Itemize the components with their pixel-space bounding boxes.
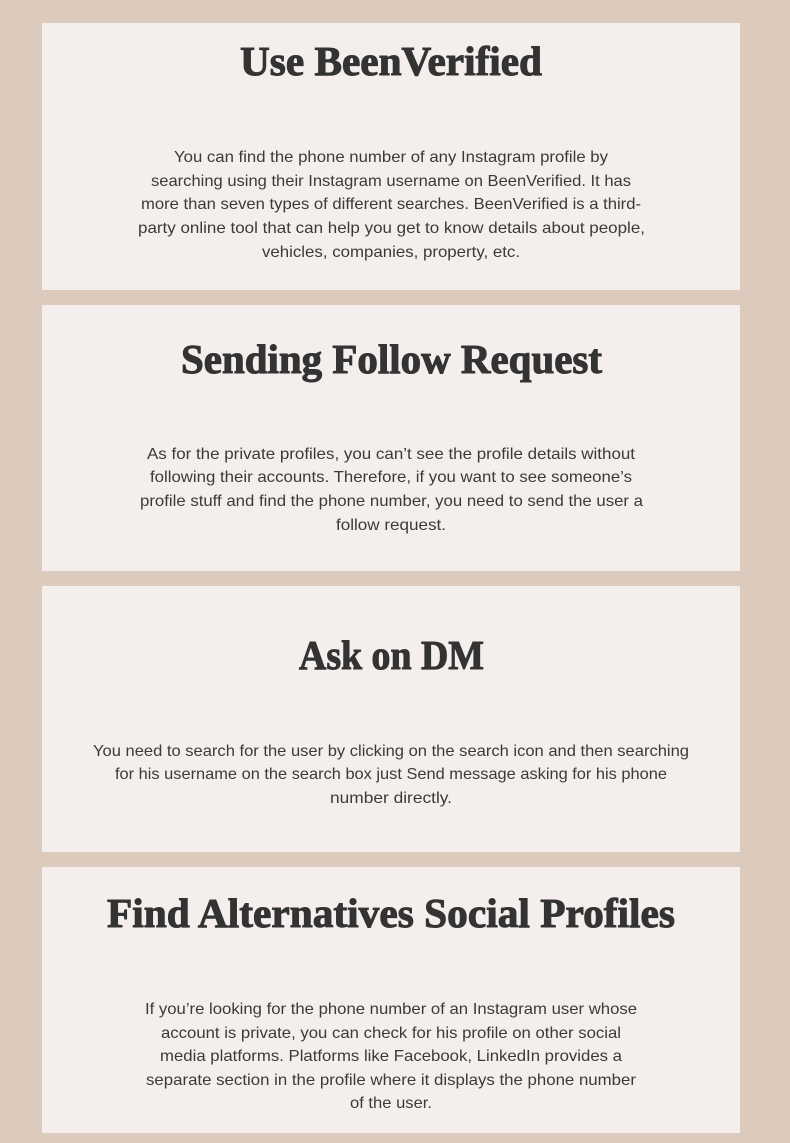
heading: Sending Follow Request: Sending Follow Request xyxy=(181,336,602,382)
text block: alternative profiles description: account is private, you can check for his profile on other social xyxy=(161,1025,621,1042)
text block: direct message description xyxy=(93,743,689,807)
panel: Sending Follow Request xyxy=(42,305,740,571)
heading: Ask on DM: Ask on DM xyxy=(299,632,484,678)
panel: Ask on DM xyxy=(42,586,740,852)
text block: direct message description: You need to search for the user by clicking on the search icon and then searching xyxy=(93,743,689,760)
text block: BeenVerified description: more than seven types of different searches. BeenVerified is a third- xyxy=(141,196,641,213)
text block: alternative profiles description: If you’re looking for the phone number of an Instagram user whose xyxy=(145,1001,637,1018)
text block: alternative profiles description: media platforms. Platforms like Facebook, LinkedIn provides a xyxy=(160,1048,622,1065)
text block: BeenVerified description xyxy=(138,149,645,261)
text block: BeenVerified description: searching using their Instagram username on BeenVerified. It has xyxy=(151,173,631,190)
text block: BeenVerified description: party online tool that can help you get to know details about people, xyxy=(138,220,645,237)
text block: follow request description: follow request. xyxy=(336,517,446,534)
heading: Use BeenVerified: Use BeenVerified xyxy=(240,38,542,84)
text block: follow request description xyxy=(140,446,643,534)
panel: Find Alternatives Social Profiles xyxy=(42,867,740,1133)
text block: direct message description: for his username on the search box just Send message asking for his phone xyxy=(115,766,667,783)
panel: Use BeenVerified xyxy=(42,23,740,290)
text block: alternative profiles description xyxy=(145,1001,637,1112)
text block: BeenVerified description: vehicles, companies, property, etc. xyxy=(262,244,520,261)
text block: alternative profiles description: of the user. xyxy=(350,1095,432,1112)
heading: Find Alternatives Social Profiles: Find Alternatives Social Profiles xyxy=(107,890,675,936)
text block: alternative profiles description: separate section in the profile where it displays the phone number xyxy=(146,1072,637,1089)
text block: follow request description: profile stuff and find the phone number, you need to send the user a xyxy=(140,493,643,510)
text block: follow request description: following their accounts. Therefore, if you want to see someone’s xyxy=(150,469,632,486)
text block: BeenVerified description: You can find the phone number of any Instagram profile by xyxy=(174,149,608,166)
text block: follow request description: As for the private profiles, you can’t see the profile details without xyxy=(147,446,636,463)
text block: direct message description: number directly. xyxy=(330,790,452,807)
